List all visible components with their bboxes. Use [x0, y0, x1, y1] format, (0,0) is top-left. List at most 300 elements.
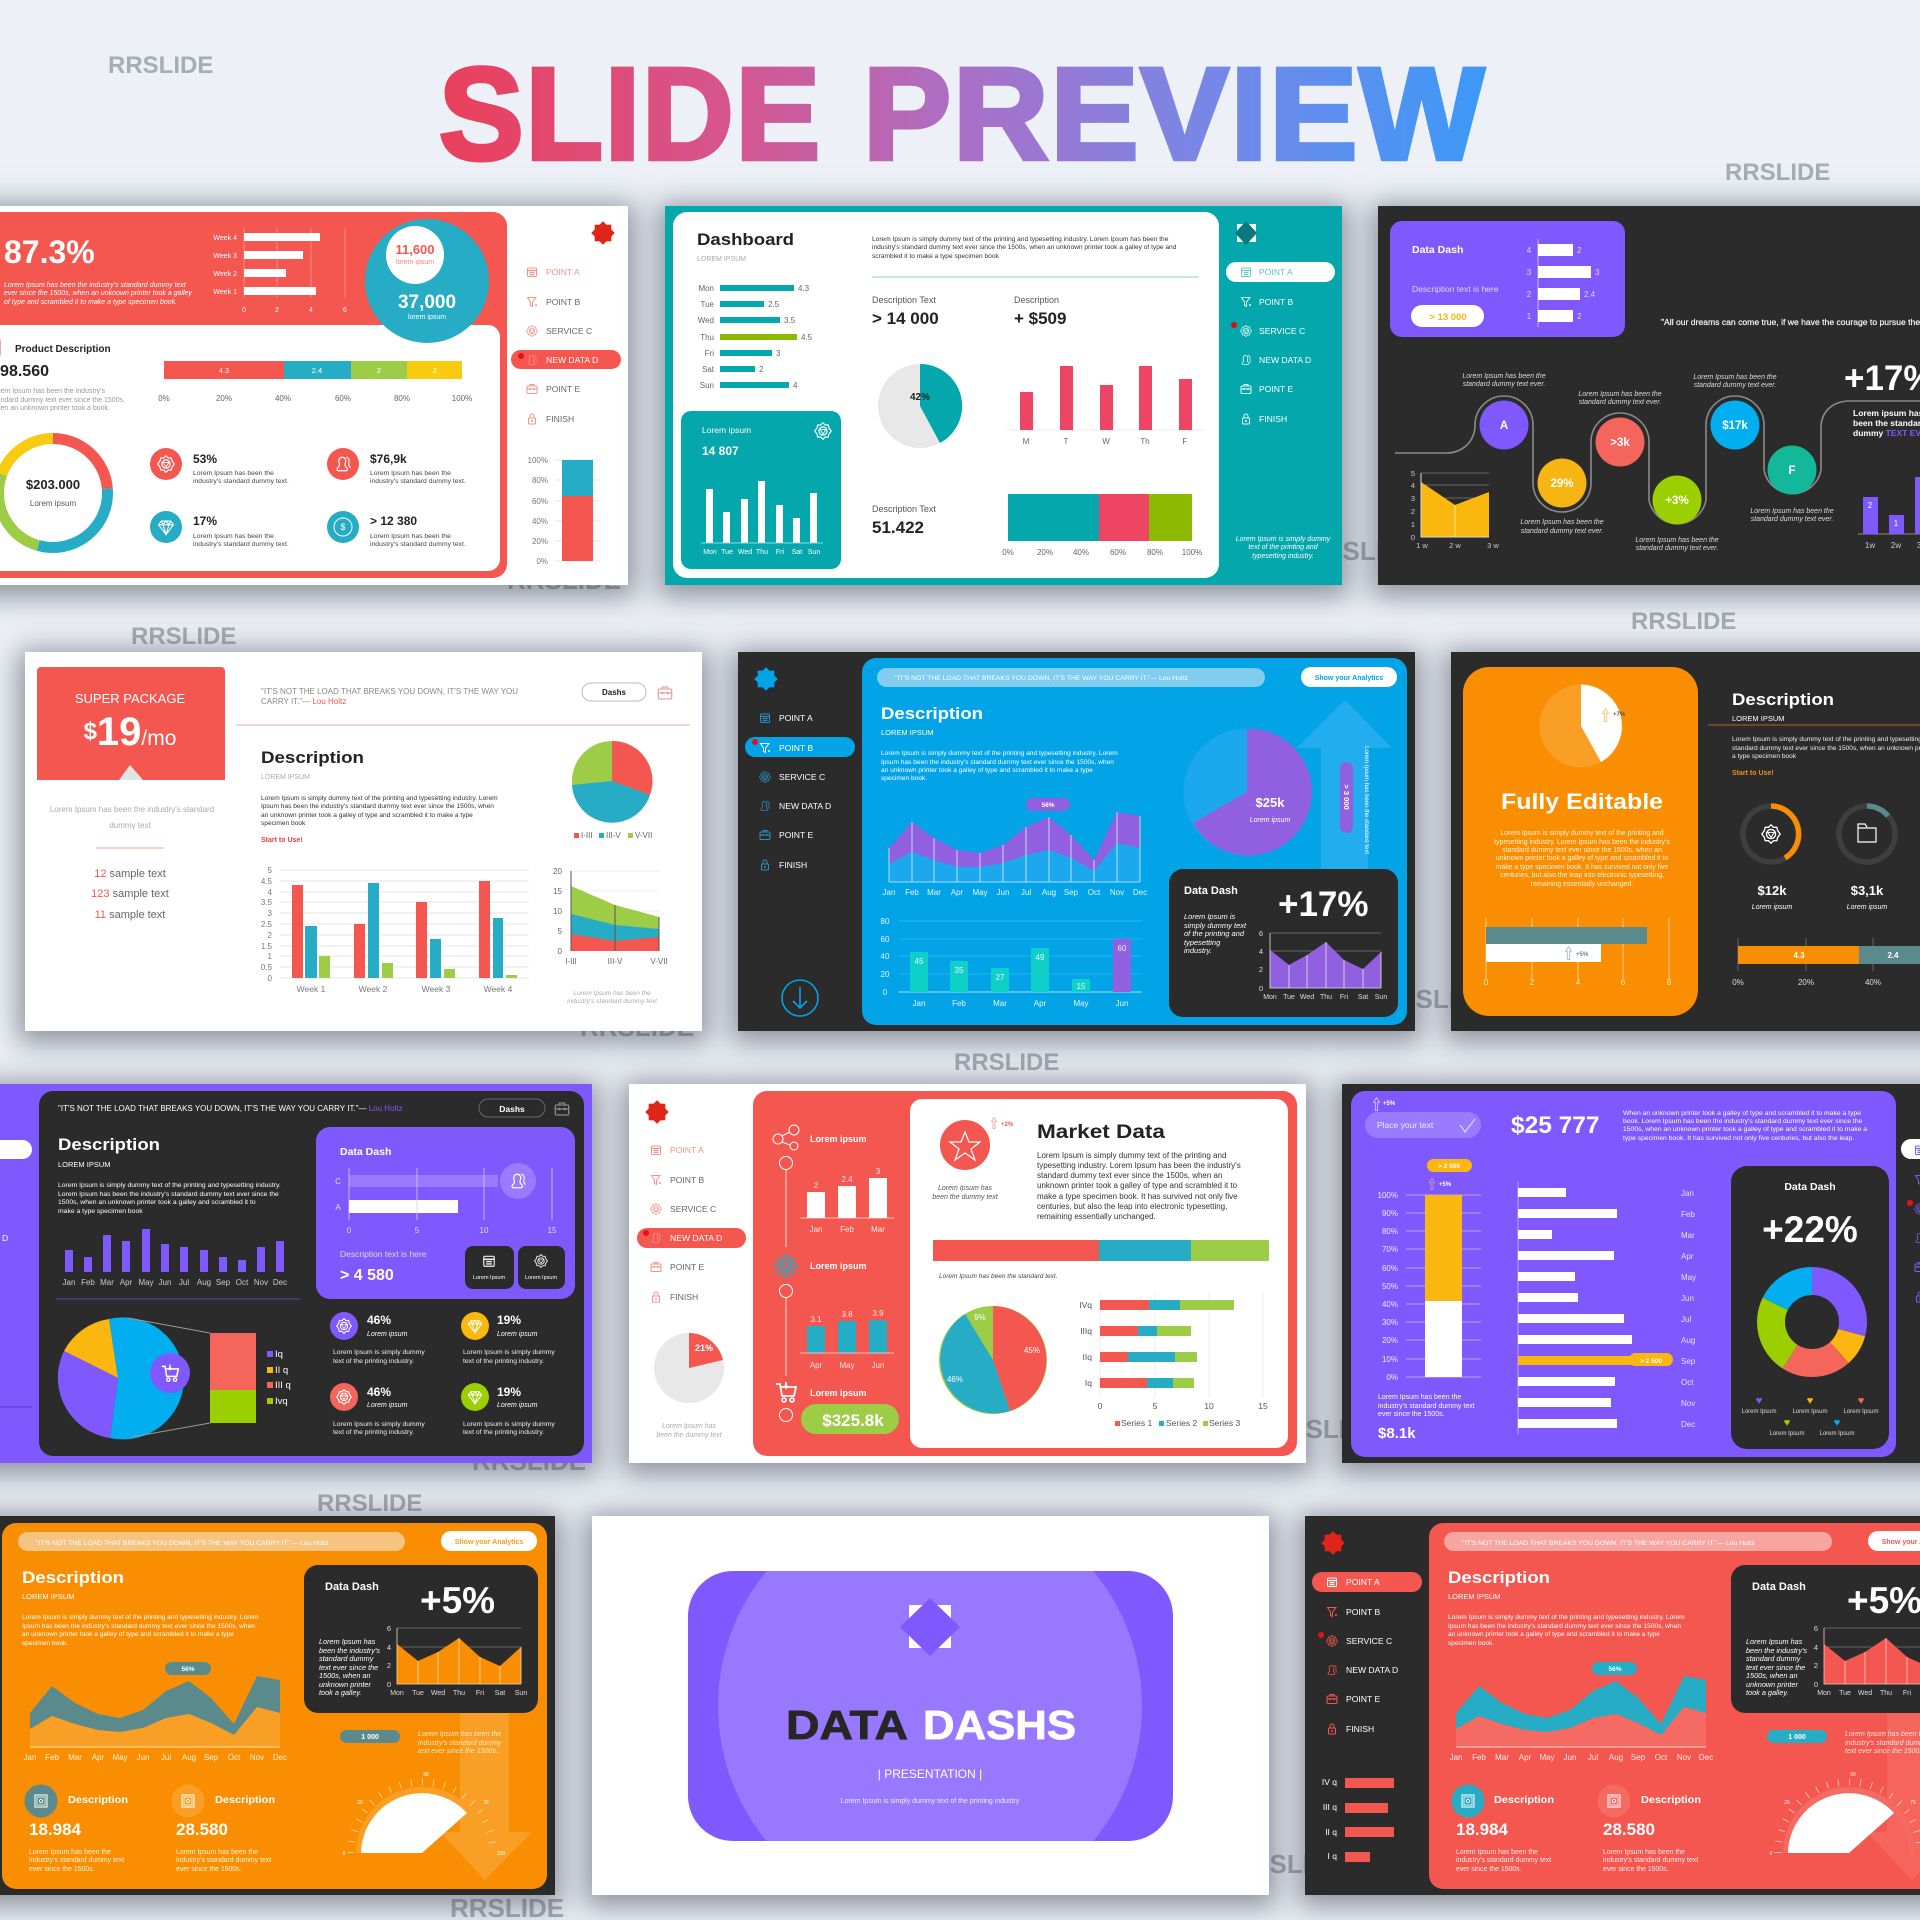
stacked bar	[1732, 938, 1920, 987]
dark data dash card: unknown printer	[1746, 1680, 1798, 1689]
pie chart: I-III	[581, 831, 593, 840]
description: Description	[881, 705, 983, 723]
percent column: 100%	[1378, 1191, 1398, 1200]
monthly columns: Apr	[120, 1278, 133, 1287]
stacked column	[528, 456, 600, 566]
purple column chart: 2	[1868, 501, 1873, 510]
horizontal bars by day: 2.5	[768, 300, 780, 309]
stat items: Lorem Ipsum has been the	[193, 470, 274, 477]
teal card with bars	[681, 411, 841, 569]
data dash card: > 4 580	[340, 1267, 394, 1284]
dark data dash card: 4	[387, 1643, 391, 1652]
coral main panel	[1429, 1523, 1920, 1889]
timeline nodes: >3k	[1610, 437, 1630, 449]
stacked percentage bar: 80%	[394, 394, 410, 403]
clustered bar chart: Week 3	[422, 984, 451, 994]
navigation remnants	[0, 1140, 32, 1407]
bar chart: weeks: Week 1	[213, 289, 237, 296]
stacked horizontal bars: Iq	[1085, 1378, 1092, 1388]
stat items: text of the printing industry.	[463, 1429, 544, 1436]
clustered bar chart: Week 4	[484, 984, 513, 994]
dark data dash card	[1731, 1166, 1889, 1449]
horizontal bars: 6	[1621, 978, 1626, 987]
stat items: Lorem Ipsum is simply dummy	[463, 1421, 555, 1428]
teal circle stat: lorem ipsum	[408, 314, 446, 321]
column chart: 27	[996, 973, 1005, 982]
teal circle stat: 37,000	[398, 292, 456, 313]
stacked percentage bar	[158, 361, 472, 403]
stacked bar: 80%	[1147, 548, 1163, 557]
stacked column: 0%	[536, 557, 548, 566]
percent column: 80%	[1382, 1227, 1398, 1236]
teal card with bars: Sat	[792, 549, 802, 556]
monthly horizontal bars: Apr	[1681, 1252, 1694, 1261]
monthly columns: Nov	[254, 1278, 268, 1287]
monthly horizontal bars: > 2 500	[1640, 1358, 1662, 1365]
area chart: 56%	[1608, 1666, 1622, 1673]
stat items: Lorem ipsum	[497, 1331, 538, 1338]
data dash card: 10	[480, 1226, 489, 1235]
description stats: industry's standard dummy text	[29, 1857, 124, 1864]
navigation: NEW DATA D	[546, 355, 598, 365]
paragraph: unknown printer took a galley of type and scrambled it to	[1037, 1181, 1238, 1190]
stacked area chart: I-III	[565, 957, 577, 966]
dashs button: Dashs	[499, 1104, 525, 1114]
stacked bar: 60%	[1110, 548, 1126, 557]
navigation: FINISH	[670, 1292, 698, 1302]
description: Lorem Ipsum is simply dummy text of the printing and typesetting industry.	[58, 1182, 281, 1189]
dark data dash card: ♥	[1756, 1395, 1762, 1407]
dark data dash card: Thu	[1320, 994, 1332, 1001]
stacked percentage bar: 2.4	[312, 366, 322, 375]
quote pill: "IT'S NOT THE LOAD THAT BREAKS YOU DOWN, IT'S THE WAY YOU CARRY IT."— Lou Holtz	[1462, 1540, 1755, 1547]
column chart: 60	[1118, 944, 1127, 953]
download icon	[782, 980, 818, 1016]
area chart: Mar	[1495, 1753, 1509, 1762]
column chart: Jan	[913, 999, 925, 1008]
area chart: Feb	[905, 888, 919, 897]
quarter bars: III q	[1323, 1802, 1337, 1812]
column chart: 0	[883, 988, 888, 997]
input pill: +5%	[1383, 1101, 1396, 1107]
paragraph: typesetting industry. Lorem Ipsum has been the industry's	[1494, 839, 1670, 846]
stacked area chart	[553, 867, 668, 966]
stat items	[330, 1312, 555, 1436]
legend: II q	[275, 1365, 288, 1376]
dark data dash card: +17%	[1278, 885, 1368, 924]
clustered bar chart: 2	[268, 931, 273, 940]
navigation: POINT A	[546, 267, 580, 277]
dark data dash card: Sat	[1358, 994, 1368, 1001]
horizontal bars by day: Thu	[700, 333, 714, 342]
dark data dash card: Sun	[515, 1690, 527, 1697]
pie chart: 9%	[974, 1313, 986, 1322]
paragraph: Lorem Ipsum is simply dummy text of the printing and typesetting industry. Lorem Ipsum has been the	[872, 236, 1169, 243]
stacked bar: 100%	[1182, 548, 1202, 557]
timeline nodes: 29%	[1550, 478, 1574, 490]
star badge	[932, 1118, 1014, 1201]
area chart: Nov	[1677, 1753, 1691, 1762]
gauge: 50	[1850, 1772, 1856, 1778]
legend: Ivq	[275, 1396, 288, 1407]
key figures: + $509	[1014, 309, 1066, 328]
dark data dash card: Fri	[1903, 1690, 1912, 1697]
description: specimen book.	[22, 1640, 68, 1647]
paragraph: centuries, but also the leap into electronic typesetting,	[1500, 872, 1664, 879]
description: Start to Use!	[1732, 770, 1774, 777]
dark data dash card: took a galley.	[1746, 1688, 1788, 1697]
up arrow background	[1297, 700, 1392, 892]
description: specimen book.	[1448, 1640, 1494, 1647]
horizontal bars by day: Sun	[700, 381, 714, 390]
bar chart: weeks: 2	[275, 307, 279, 314]
vertical pill and note: > 3 000	[1342, 784, 1351, 810]
column chart: 49	[1036, 953, 1045, 962]
area chart: Jul	[161, 1753, 171, 1762]
description stats: Lorem Ipsum has been the	[1456, 1849, 1538, 1856]
description: Lorem Ipsum has been the industry's standard dummy text ever since the	[58, 1191, 279, 1198]
yellow area chart: 3	[1411, 494, 1415, 503]
yellow area chart: 1	[1411, 520, 1415, 529]
description stats: industry's standard dummy text	[1456, 1857, 1551, 1864]
stacked area chart: 20	[553, 867, 563, 876]
description	[881, 705, 1118, 782]
description: LOREM IPSUM	[261, 774, 310, 781]
panel: slide 4 super package	[25, 652, 702, 1031]
purple column chart: 2w	[1891, 541, 1901, 550]
gauge	[343, 1772, 505, 1857]
watermark: RRSLIDE behind slide 1: RRSLIDE	[507, 565, 621, 595]
horizontal bars	[1484, 918, 1672, 987]
monthly horizontal bars: Sep	[1681, 1357, 1696, 1366]
area chart	[1450, 1662, 1713, 1762]
percent column: 20%	[1382, 1336, 1398, 1345]
stacked percentage bar: 20%	[216, 394, 232, 403]
key figures	[872, 295, 1066, 537]
dark data dash card: Wed	[431, 1690, 445, 1697]
dark data dash card: 1500s, when an	[1746, 1671, 1798, 1680]
description stats: 28.580	[1603, 1820, 1655, 1839]
heading Dashboard: Dashboard	[697, 230, 794, 249]
dark data dash card: of the printing and	[1184, 929, 1245, 938]
stat items: 19%	[497, 1313, 521, 1327]
panel: slide 12 coral description	[1305, 1516, 1920, 1895]
dark main panel	[39, 1091, 584, 1456]
description: Description	[261, 749, 364, 767]
area chart: May	[972, 888, 988, 897]
timeline labels: Lorem ipsum	[810, 1134, 867, 1144]
stat items: Lorem Ipsum is simply dummy	[463, 1349, 555, 1356]
horizontal bars by day: Mon	[698, 284, 714, 293]
paragraph: scrambled it to make a type specimen book	[872, 253, 1000, 260]
small pie 21%	[654, 1333, 724, 1439]
stacked column: 60%	[532, 497, 548, 506]
monthly columns: Sep	[216, 1278, 231, 1287]
clustered bar chart: 0.5	[261, 963, 273, 972]
vertical pill and note	[1340, 746, 1369, 854]
area chart: Aug	[182, 1753, 196, 1762]
description stats: 28.580	[176, 1820, 228, 1839]
paragraph: remaining essentially unchanged.	[1037, 1212, 1156, 1221]
quote pill	[18, 1532, 405, 1551]
star badge: +2%	[1001, 1122, 1014, 1128]
stacked percentage bar: 40%	[275, 394, 291, 403]
dark data dash card: 2	[387, 1661, 391, 1670]
monthly horizontal bars: Oct	[1681, 1378, 1694, 1387]
dark data dash card: 2	[1259, 965, 1263, 974]
gauge: 0	[1770, 1851, 1773, 1857]
percent column: 10%	[1382, 1355, 1398, 1364]
white main panel	[673, 212, 1219, 578]
dark data dash card: 2	[1814, 1661, 1818, 1670]
teal columns: Jun	[872, 1361, 884, 1370]
stacked area chart: V-VII	[650, 957, 668, 966]
title: SLIDE PREVIEW: PREVIEW	[863, 40, 1486, 187]
dark data dash card: Data Dash	[1752, 1581, 1806, 1593]
navigation: POINT A	[1259, 267, 1293, 277]
pie chart: 46%	[947, 1375, 963, 1384]
show analytics button: Show your Analytics	[455, 1539, 523, 1546]
percent column: > 2 500	[1438, 1163, 1460, 1170]
area chart: Feb	[1472, 1753, 1486, 1762]
white columns: 3	[876, 1167, 881, 1176]
area chart: Jun	[137, 1753, 149, 1762]
area chart: Sep	[204, 1753, 219, 1762]
description stats: 18.984	[1456, 1820, 1509, 1839]
column note: Lorem Ipsum has been the	[1378, 1394, 1461, 1401]
description: Start to Use!	[261, 837, 303, 844]
heading DATA DASHS: DASHS	[923, 1702, 1076, 1748]
panel: slide 11 data dashs cover	[592, 1516, 1269, 1895]
bar chart: weeks: Week 2	[213, 271, 237, 278]
quote pill: "IT'S NOT THE LOAD THAT BREAKS YOU DOWN, IT'S THE WAY YOU CARRY IT."— Lou Holtz	[36, 1540, 329, 1547]
percent column: 60%	[1382, 1264, 1398, 1273]
description	[58, 1136, 281, 1215]
package notes: 123 sample text	[91, 888, 169, 900]
horizontal bars by day: 2	[759, 365, 764, 374]
orange card	[1463, 667, 1698, 1016]
dark data dash card: Lorem Ipsum is	[1184, 912, 1236, 921]
navigation: FINISH	[779, 860, 807, 870]
stacked area chart: 15	[553, 887, 563, 896]
navigation: POINT B	[1346, 1607, 1380, 1617]
dark data dash card: 1500s, when an	[319, 1671, 371, 1680]
pill 1000 and note	[340, 1730, 502, 1755]
description stats: industry's standard dummy text	[176, 1857, 271, 1864]
description	[1448, 1569, 1685, 1647]
pill 1000 and note	[1767, 1730, 1920, 1755]
heading DATA DASHS: DATA	[786, 1702, 908, 1748]
stacked percentage bar: 100%	[452, 394, 472, 403]
stacked area chart: 5	[558, 927, 563, 936]
stat items: 46%	[367, 1385, 391, 1399]
progress ring $12k	[1743, 806, 1799, 911]
description stats: Description	[215, 1794, 275, 1806]
stacked bar: 20%	[1798, 978, 1814, 987]
bar chart: weeks: 0	[242, 307, 246, 314]
description: Lorem Ipsum is simply dummy text of the printing and typesetting industry. Lorem	[881, 750, 1118, 757]
dark data dash card	[304, 1565, 538, 1713]
description: Ipsum has been the industry's standard dummy text ever since the 1500s, when	[261, 803, 494, 810]
dark data dash card: Thu	[1880, 1690, 1892, 1697]
monthly horizontal bars: Jan	[1681, 1189, 1694, 1198]
area chart: Apr	[92, 1753, 105, 1762]
percent column: 30%	[1382, 1318, 1398, 1327]
timeline captions: Lorem Ipsum has been the	[1578, 391, 1662, 398]
purple data dash card	[1390, 221, 1625, 337]
timeline captions: Lorem Ipsum has been the	[1750, 508, 1834, 515]
purple column chart	[1858, 477, 1920, 550]
paragraph: industry's standard dummy text ever since the 1500s, when an unknown printer took a galley of type and	[872, 244, 1177, 251]
package notes: 11 sample text	[95, 909, 165, 921]
stacked bar: 2.4	[1887, 951, 1899, 960]
teal circle stat: lorem ipsum	[396, 259, 434, 266]
paragraph: make a type specimen book. It has survived not only five	[1037, 1192, 1238, 1201]
stacked horizontal bars	[1079, 1292, 1268, 1428]
purple data dash card: Description text is here	[1412, 284, 1499, 294]
watermark: RRSLIDE behind slide 12: RRSLIDE	[1232, 1849, 1346, 1879]
dark data dash card: ♥	[1834, 1417, 1840, 1429]
italic note: Lorem Ipsum has been the	[573, 990, 651, 997]
dark data dash card: Lorem Ipsum	[1819, 1431, 1855, 1437]
timeline captions: Lorem Ipsum has been the	[1462, 373, 1546, 380]
stacked horizontal bars: IIIq	[1080, 1326, 1092, 1336]
dark data dash card: Mon	[1817, 1690, 1831, 1697]
yellow area chart: 1 w	[1416, 541, 1428, 550]
dashs button: Dashs	[602, 688, 627, 697]
area chart: Nov	[250, 1753, 264, 1762]
area chart: Jul	[1588, 1753, 1598, 1762]
quarter bars	[1322, 1777, 1394, 1862]
down arrow background	[1867, 1706, 1920, 1880]
area chart: Mar	[927, 888, 941, 897]
pie chart	[572, 741, 653, 840]
area chart: Jan	[24, 1753, 36, 1762]
stacked bar	[1002, 494, 1202, 557]
dark data dash card: typesetting	[1184, 938, 1221, 947]
horizontal bars by day: Sat	[702, 365, 715, 374]
teal circle stat	[365, 219, 489, 343]
description	[261, 749, 498, 844]
navigation: POINT E	[1346, 1694, 1380, 1704]
paragraph: type specimen book. It has survived not only five centuries, but also the leap.	[1623, 1135, 1854, 1142]
navigation: POINT A	[779, 713, 813, 723]
column chart: 15	[1077, 982, 1086, 991]
stacked horizontal bars: 0	[1098, 1401, 1103, 1411]
panel: slide 1 product dashboard	[0, 206, 628, 585]
panel: slide 5 blue description	[738, 652, 1415, 1031]
stacked percentage bar: 2	[377, 366, 381, 375]
key figures: Description Text	[872, 504, 936, 514]
stacked column: 20%	[532, 537, 548, 546]
timeline labels: Lorem ipsum	[810, 1261, 867, 1271]
area chart: Aug	[1609, 1753, 1623, 1762]
description: LOREM IPSUM	[1448, 1592, 1501, 1601]
panel: slide 6 fully editable	[1451, 652, 1920, 1031]
column chart: 40	[881, 952, 890, 961]
clustered bar chart: 4.5	[261, 877, 273, 886]
column chart: 35	[955, 966, 964, 975]
description: an unknown printer took a galley of type and scrambled it to make a type	[881, 767, 1093, 774]
timeline captions: standard dummy text ever.	[1463, 381, 1545, 388]
monthly columns: Aug	[197, 1278, 211, 1287]
column note: $8.1k	[1378, 1425, 1416, 1442]
icon: logo diamond	[900, 1598, 960, 1656]
area chart: Apr	[1519, 1753, 1532, 1762]
area chart: Dec	[273, 1753, 287, 1762]
stat items	[150, 448, 466, 548]
paragraph: Lorem Ipsum is simply dummy text of the printing and	[1037, 1151, 1226, 1160]
navigation: POINT B	[1259, 297, 1293, 307]
dark data dash card: simply dummy text	[1184, 921, 1247, 930]
purple data dash card: 4	[1527, 246, 1532, 255]
legend: III q	[275, 1380, 291, 1391]
teal card with bars: Thu	[756, 549, 768, 556]
price card: $	[84, 718, 98, 745]
value pill: $325.8k	[822, 1411, 884, 1430]
stacked area chart: 0	[558, 947, 563, 956]
teal card with bars: Wed	[738, 549, 752, 556]
stat items: 53%	[193, 452, 217, 466]
stacked horizontal bars: Series 3	[1209, 1418, 1240, 1428]
stat items: Lorem Ipsum has been the	[370, 533, 451, 540]
timeline captions: standard dummy text ever.	[1521, 528, 1603, 535]
legend: Iq	[275, 1349, 283, 1360]
dark data dash card: ♥	[1858, 1395, 1864, 1407]
stat items: industry's standard dummy text.	[193, 478, 289, 485]
timeline column	[773, 1125, 799, 1422]
navigation: SERVICE C	[1259, 326, 1305, 336]
navigation	[745, 667, 855, 870]
horizontal bars by day: Fri	[705, 349, 714, 358]
percent column	[1378, 1159, 1481, 1382]
stat items: Lorem ipsum	[367, 1331, 408, 1338]
winding timeline path	[1395, 396, 1920, 524]
stacked percentage bar: 60%	[335, 394, 351, 403]
description: specimen book.	[881, 775, 927, 782]
value pill	[801, 1404, 899, 1434]
description stats: ever since the 1500s.	[29, 1866, 95, 1873]
area chart: Sep	[1631, 1753, 1646, 1762]
yellow area chart: 3 w	[1487, 541, 1499, 550]
teal columns	[800, 1309, 894, 1370]
vertical pill and note: Lorem Ipsum has been the standard text	[1363, 746, 1369, 854]
percent column: 90%	[1382, 1209, 1398, 1218]
stacked horizontal bars: IVq	[1079, 1300, 1092, 1310]
dark data dash card: 6	[1259, 929, 1263, 938]
white columns: Jan	[810, 1225, 822, 1234]
column chart: May	[1073, 999, 1089, 1008]
clustered bar chart: 4	[268, 888, 273, 897]
stat items: $	[340, 522, 346, 532]
description	[1708, 691, 1920, 777]
navigation remnants	[1901, 1139, 1920, 1302]
purple data dash card: > 13 000	[1429, 312, 1467, 323]
dark data dash card: +5%	[420, 1580, 495, 1621]
gauge: 25	[1784, 1800, 1790, 1806]
stat items: 17%	[193, 514, 217, 528]
column chart: 20	[881, 970, 890, 979]
watermark: RRSLIDE behind slide 4: RRSLIDE	[580, 1012, 694, 1042]
paragraph: Lorem Ipsum is simply dummy text of the printing and	[1500, 830, 1664, 837]
quarter bars: I q	[1328, 1851, 1337, 1861]
purple data dash card: Data Dash	[1412, 244, 1463, 256]
clustered bar chart: 3	[268, 909, 273, 918]
pill 1000 and note: industry's standard dummy	[418, 1740, 502, 1747]
clustered bar chart	[261, 866, 529, 994]
monthly columns: May	[138, 1278, 154, 1287]
paragraph: standard dummy text ever since the 1500s, when an	[1502, 847, 1662, 854]
